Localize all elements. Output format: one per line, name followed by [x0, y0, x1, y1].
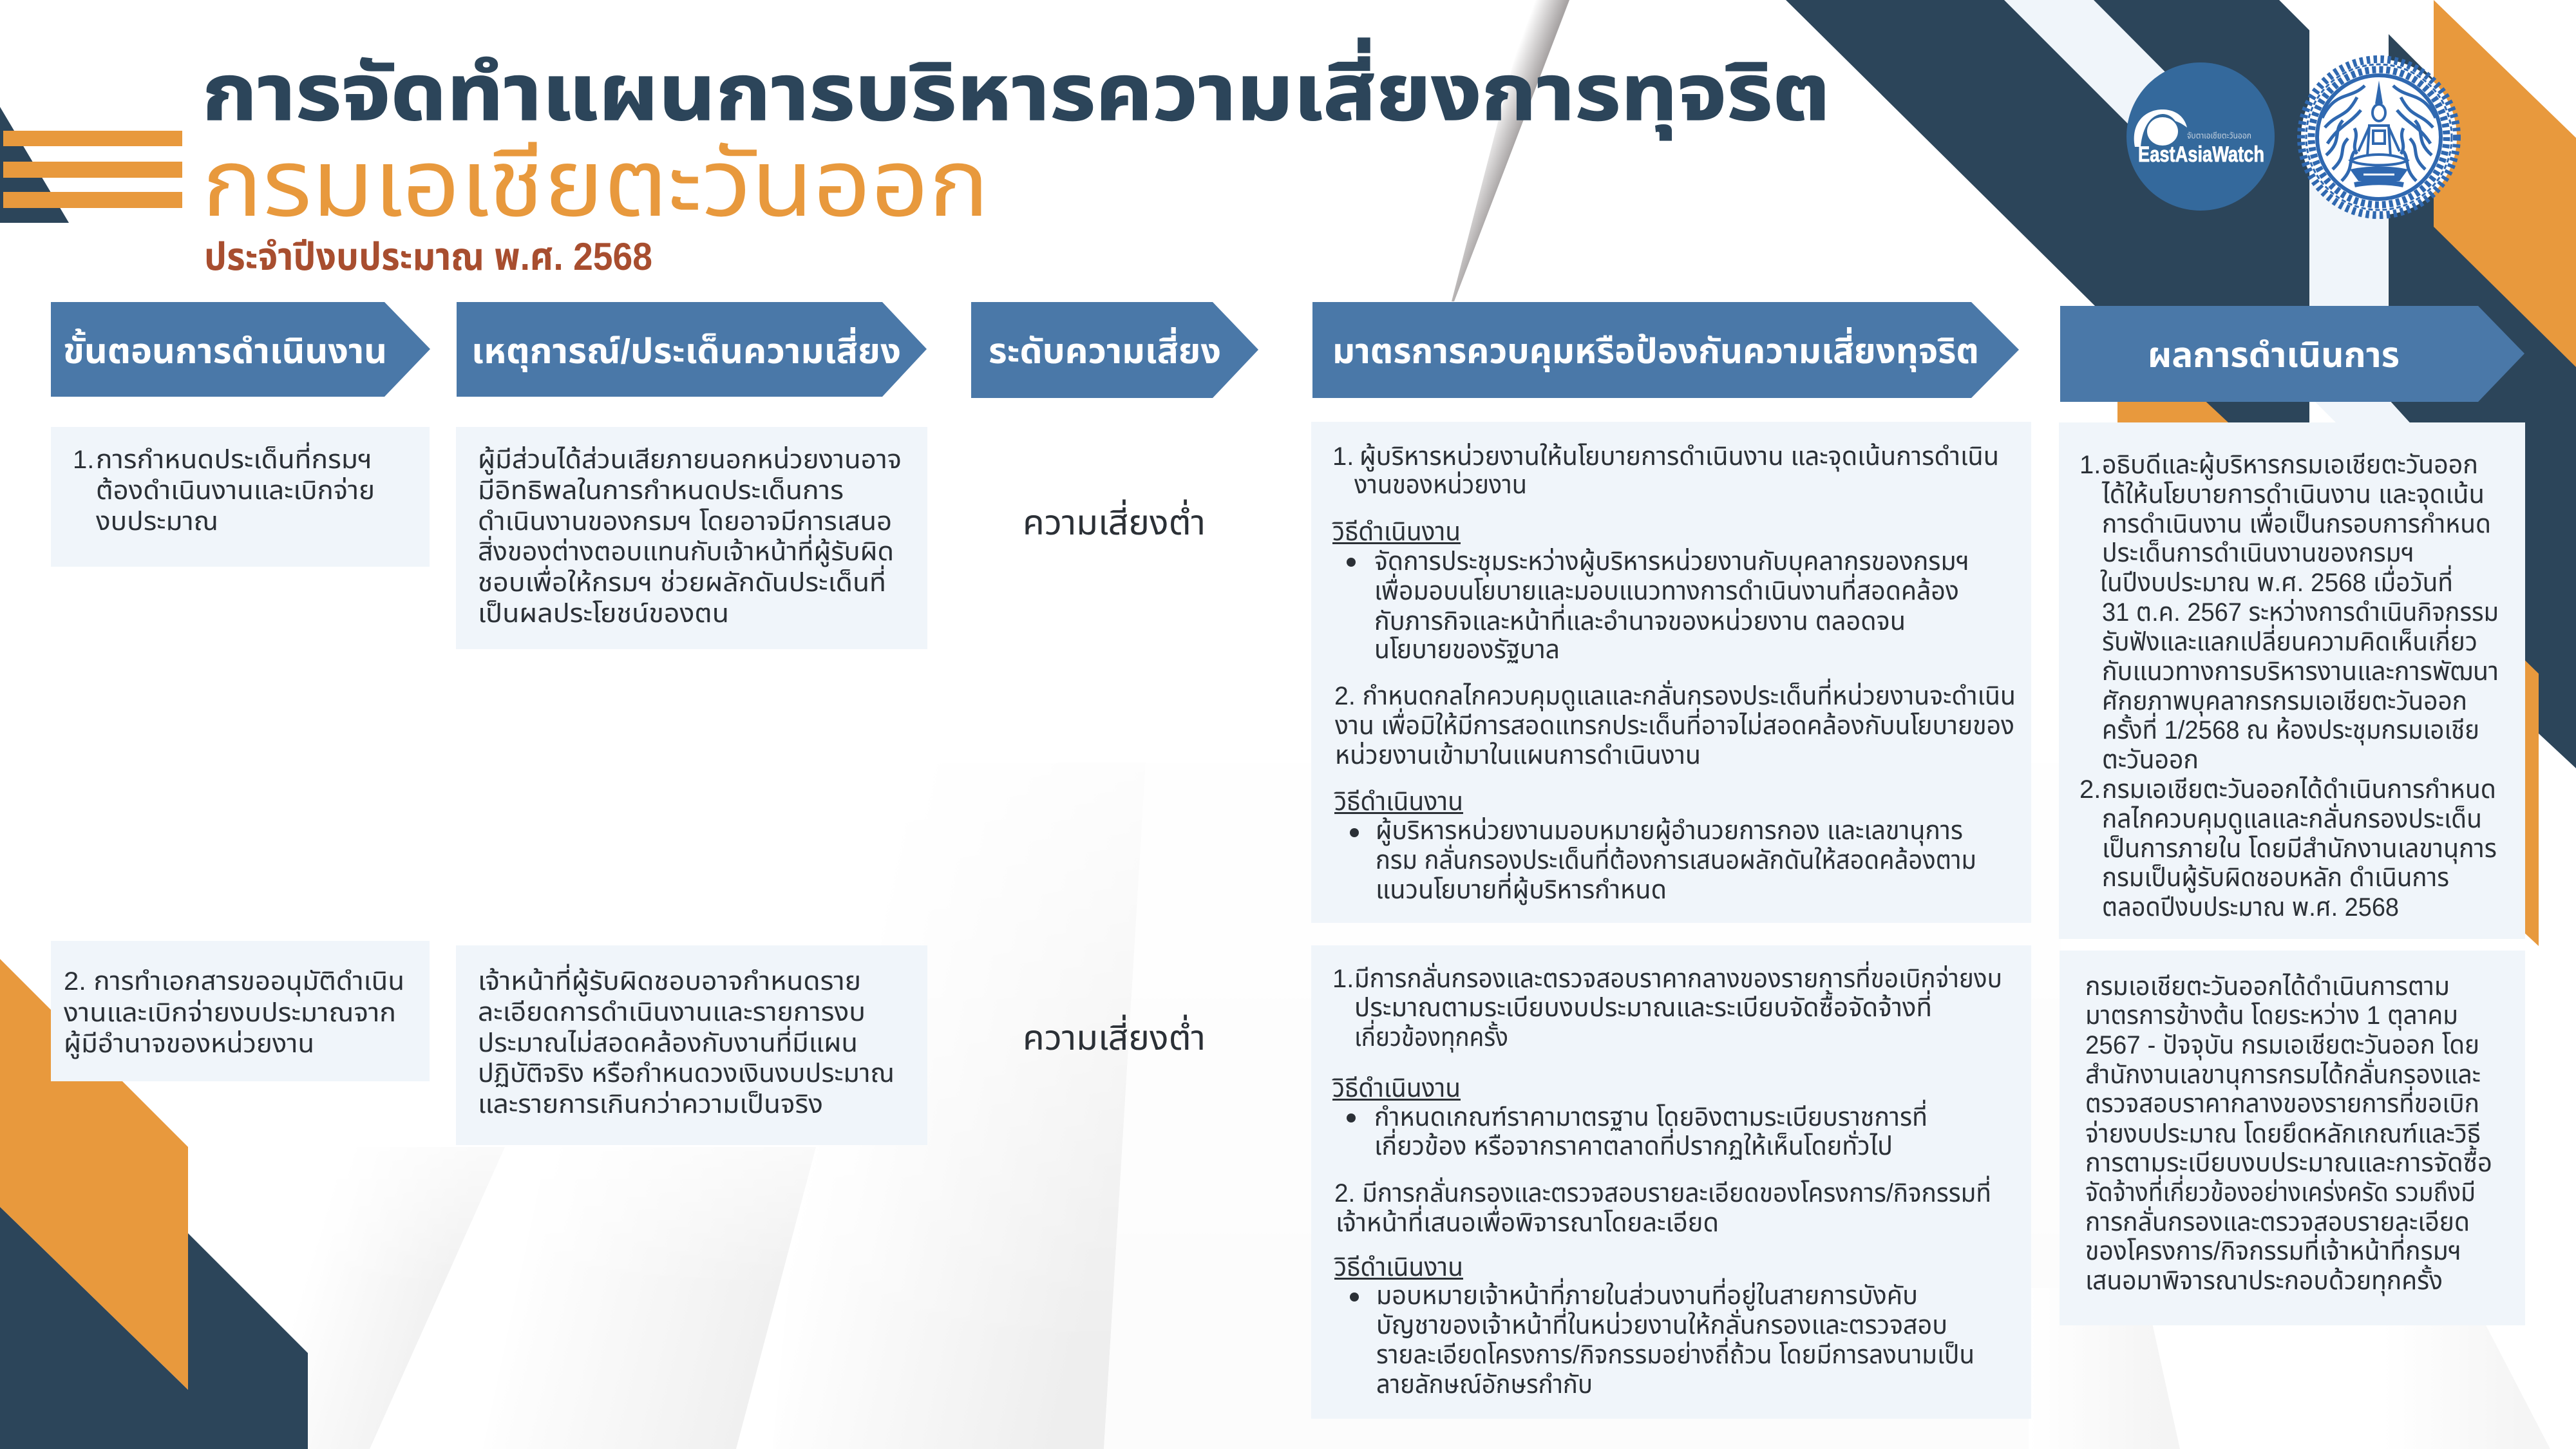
- panel: control measures 2: มีการกลั่นกรองและตรวจสอบราคากลางของรายการที่ขอเบิกจ่ายงบ: [1354, 961, 2002, 993]
- panel: results 1: 2.: [2079, 775, 2101, 804]
- panel: results 1: กรมเป็นผู้รับผิดชอบหลัก ดำเนินการ: [2102, 864, 2449, 893]
- panel: control measures 1: ผู้บริหารหน่วยงานมอบหมายผู้อำนวยการกอง และเลขานุการ: [1376, 817, 1963, 846]
- panel: risk event 1: ดำเนินงานของกรมฯ โดยอาจมีการเสนอ: [478, 507, 892, 536]
- panel: results 2: ตรวจสอบราคากลางของรายการที่ขอเบิก: [2085, 1086, 2479, 1118]
- panel: control measures 1: งานของหน่วยงาน: [1354, 471, 1527, 499]
- panel: control measures 1: กับภารกิจและหน้าที่และอำนาจของหน่วยงาน ตลอดจน: [1374, 603, 1906, 636]
- panel: risk event 2: ปฏิบัติจริง หรือกำหนดวงเงินงบประมาณ: [478, 1059, 895, 1088]
- panel: control measures 2: กำหนดเกณฑ์ราคามาตรฐาน โดยอิงตามระเบียบราชการที่: [1374, 1099, 1927, 1132]
- panel: step 2: งานและเบิกจ่ายงบประมาณจาก: [64, 999, 396, 1027]
- panel: step 1: งบประมาณ: [96, 507, 218, 536]
- panel: control measures 1: 2. กำหนดกลไกควบคุมดูแลและกลั่นกรองประเด็นที่หน่วยงานจะดำเนิน: [1334, 678, 2016, 711]
- panel: control measures 1: แนวนโยบายที่ผู้บริหารกำหนด: [1376, 872, 1667, 905]
- panel: risk event 2: และรายการเกินกว่าความเป็นจริง: [478, 1090, 823, 1119]
- panel: control measures 2: รายละเอียดโครงการ/กิจกรรมอย่างถี่ถ้วน โดยมีการลงนามเป็น: [1376, 1337, 1975, 1369]
- panel: control measures 1: เพื่อมอบนโยบายและมอบแนวทางการดำเนินงานที่สอดคล้อง: [1374, 573, 1959, 605]
- panel: results 1: กับแนวทางการบริหารงานและการพัฒนา: [2102, 658, 2499, 686]
- panel: control measures 2: 2. มีการกลั่นกรองและตรวจสอบรายละเอียดของโครงการ/กิจกรรมที่: [1334, 1175, 1991, 1208]
- panel: results 2: ของโครงการ/กิจกรรมที่เจ้าหน้าที่กรมฯ: [2085, 1233, 2461, 1265]
- panel: risk event 2: ละเอียดการดำเนินงานและรายการงบ: [478, 998, 866, 1027]
- panel: control measures 1: จัดการประชุมระหว่างผู้บริหารหน่วยงานกับบุคลากรของกรมฯ: [1374, 547, 1969, 576]
- logo: department seal: [2301, 59, 2457, 215]
- panel: results 1: ครั้งที่ 1/2568 ณ ห้องประชุมกรมเอเชีย: [2102, 712, 2479, 745]
- header arrow: results: ผลการดำเนินการ: [2148, 336, 2400, 375]
- panel: results 1: ตลอดปีงบประมาณ พ.ศ. 2568: [2102, 893, 2399, 922]
- panel: control measures 2: 1.: [1332, 965, 1354, 993]
- panel: control measures 1: [1311, 422, 2031, 923]
- header arrow: control measures: มาตรการควบคุมหรือป้องกันความเสี่ยงทุจริต: [1332, 327, 1979, 372]
- header arrow: process steps: ขั้นตอนการดำเนินงาน: [63, 328, 387, 371]
- panel: control measures 1: กรม กลั่นกรองประเด็นที่ต้องการเสนอผลักดันให้สอดคล้องตาม: [1376, 842, 1976, 875]
- header arrow: risk events: [457, 302, 927, 397]
- panel: results 2: การตามระเบียบงบประมาณและการจัดซื้อ: [2085, 1145, 2492, 1177]
- panel: control measures 2: [1311, 945, 2031, 1419]
- panel: control measures 1: หน่วยงานเข้ามาในแผนการดำเนินงาน: [1335, 741, 1701, 770]
- panel: risk event 2: ประมาณไม่สอดคล้องกับงานที่มีแผน: [478, 1025, 858, 1057]
- panel: results 1: ศักยภาพบุคลากรกรมเอเชียตะวันออก: [2102, 687, 2467, 716]
- panel: results 1: ตะวันออก: [2102, 746, 2199, 774]
- panel: control measures 1: 1.: [1332, 442, 1354, 471]
- panel: control measures 1: งาน เพื่อมิให้มีการสอดแทรกประเด็นที่อาจไม่สอดคล้องกับนโยบายของ: [1335, 708, 2014, 740]
- panel: control measures 1: วิธีดำเนินงาน: [1334, 788, 1463, 816]
- panel: control measures 2: เกี่ยวข้อง หรือจากราคาตลาดที่ปรากฏให้เห็นโดยทั่วไป: [1374, 1128, 1893, 1160]
- panel: risk event 1: สิ่งของต่างตอบแทนกับเจ้าหน้าที่ผู้รับผิด: [478, 534, 894, 567]
- panel: risk event 2: เจ้าหน้าที่ผู้รับผิดชอบอาจกำหนดราย: [478, 963, 861, 996]
- panel: results 1: กรมเอเชียตะวันออกได้ดำเนินการกำหนด: [2102, 775, 2496, 804]
- panel: results 1: การดำเนินงาน เพื่อเป็นกรอบการกำหนด: [2102, 506, 2491, 538]
- panel: control measures 1: วิธีดำเนินงาน: [1332, 518, 1461, 546]
- logo: East Asia Watch: EastAsiaWatch: [2138, 142, 2264, 167]
- panel: results 1: 31 ต.ค. 2567 ระหว่างการดำเนินกิจกรรม: [2102, 598, 2499, 627]
- panel: results 2: สำนักงานเลขานุการกรมได้กลั่นกรองและ: [2085, 1058, 2481, 1090]
- panel: control measures 2: วิธีดำเนินงาน: [1332, 1074, 1461, 1103]
- risk level label 1: ความเสี่ยงต่ำ: [1023, 499, 1206, 542]
- decoration: bottom-left bands: [0, 959, 308, 1449]
- panel: risk event 1: ผู้มีส่วนได้ส่วนเสียภายนอกหน่วยงานอาจ: [478, 446, 902, 475]
- risk level label 2: ความเสี่ยงต่ำ: [1023, 1014, 1206, 1057]
- panel: control measures 2: บัญชาของเจ้าหน้าที่ในหน่วยงานให้กลั่นกรองและตรวจสอบ: [1376, 1307, 1947, 1340]
- panel: results 2: การกลั่นกรองและตรวจสอบรายละเอียด: [2085, 1206, 2470, 1236]
- panel: step 2: ผู้มีอำนาจของหน่วยงาน: [64, 1030, 314, 1059]
- panel: control measures 2: ลายลักษณ์อักษรกำกับ: [1376, 1370, 1593, 1399]
- panel: step 1: 1.: [73, 446, 94, 474]
- panel: results 1: เป็นการภายใน โดยมีสำนักงานเลขานุการ: [2102, 835, 2497, 864]
- panel: control measures 1: ผู้บริหารหน่วยงานให้นโยบายการดำเนินงาน และจุดเน้นการดำเนิน: [1359, 442, 1999, 471]
- panel: results 2: 2567 - ปัจจุบัน กรมเอเชียตะวันออก โดย: [2085, 1031, 2479, 1060]
- panel: control measures 2: เกี่ยวข้องทุกครั้ง: [1354, 1019, 1508, 1052]
- panel: results 1: 1.: [2079, 451, 2101, 479]
- subtitle: กรมเอเชียตะวันออก: [202, 131, 989, 236]
- panel: step 2: [51, 941, 430, 1081]
- panel: results 1: ประเด็นการดำเนินงานของกรมฯ: [2102, 539, 2414, 567]
- panel: risk event 1: [456, 427, 927, 649]
- panel: results 2: จ่ายงบประมาณ โดยยึดหลักเกณฑ์และวิธี: [2085, 1120, 2481, 1148]
- fiscal year line: ประจำปีงบประมาณ พ.ศ. 2568: [204, 235, 652, 278]
- panel: results 1: กลไกควบคุมดูแลและกลั่นกรองประเด็น: [2102, 802, 2482, 834]
- panel: risk event 1: มีอิทธิพลในการกำหนดประเด็นการ: [478, 477, 844, 505]
- header arrow: risk events: เหตุการณ์/ประเด็นความเสี่ยง: [471, 327, 901, 372]
- panel: step 2: 2. การทำเอกสารขออนุมัติดำเนิน: [64, 967, 404, 996]
- header arrow: risk level: ระดับความเสี่ยง: [989, 327, 1221, 371]
- panel: results 1: รับฟังและแลกเปลี่ยนความคิดเห็นเกี่ยว: [2102, 624, 2477, 656]
- panel: step 1: [51, 427, 430, 567]
- panel: results 1: [2059, 422, 2525, 939]
- panel: control measures 1: นโยบายของรัฐบาล: [1374, 636, 1560, 664]
- decoration: top-left triangle and orange bars: [0, 107, 182, 223]
- logo: East Asia Watch: [2126, 62, 2275, 211]
- panel: control measures 2: เจ้าหน้าที่เสนอเพื่อพิจารณาโดยละเอียด: [1336, 1205, 1719, 1237]
- panel: step 1: การกำหนดประเด็นที่กรมฯ: [96, 442, 372, 474]
- panel: results 1: ได้ให้นโยบายการดำเนินงาน และจุดเน้น: [2101, 480, 2485, 509]
- title: การจัดทำแผนการบริหารความเสี่ยงการทุจริต: [202, 38, 1830, 140]
- panel: results 1: อธิบดีและผู้บริหารกรมเอเชียตะวันออก: [2102, 451, 2478, 480]
- header arrow: control measures: [1312, 302, 2019, 398]
- panel: risk event 1: เป็นผลประโยชน์ของตน: [478, 600, 729, 628]
- panel: risk event 2: [456, 945, 927, 1145]
- panel: results 2: เสนอมาพิจารณาประกอบด้วยทุกครั้ง: [2085, 1264, 2443, 1296]
- panel: results 2: มาตรการข้างต้น โดยระหว่าง 1 ตุลาคม: [2085, 1001, 2458, 1030]
- panel: control measures 2: มอบหมายเจ้าหน้าที่ภายในส่วนงานที่อยู่ในสายการบังคับ: [1376, 1278, 1918, 1311]
- decoration: top-right geometric bands: [1786, 0, 2576, 946]
- header arrow: process steps: [51, 302, 430, 397]
- panel: control measures 2: วิธีดำเนินงาน: [1334, 1253, 1463, 1282]
- panel: control measures 2: ประมาณตามระเบียบงบประมาณและระเบียบจัดซื้อจัดจ้างที่: [1354, 990, 1932, 1022]
- panel: results 2: จัดจ้างที่เกี่ยวข้องอย่างเคร่งครัด รวมถึงมี: [2085, 1175, 2476, 1207]
- header arrow: risk level: [971, 302, 1258, 398]
- panel: step 1: ต้องดำเนินงานและเบิกจ่าย: [96, 477, 375, 505]
- panel: results 2: กรมเอเชียตะวันออกได้ดำเนินการตาม: [2085, 972, 2450, 1001]
- panel: results 1: ในปีงบประมาณ พ.ศ. 2568 เมื่อวันที่: [2100, 565, 2453, 597]
- panel: risk event 1: ชอบเพื่อให้กรมฯ ช่วยผลักดันประเด็นที่: [478, 565, 886, 597]
- header arrow: results: [2060, 306, 2524, 402]
- panel: results 2: [2060, 951, 2525, 1325]
- logo: East Asia Watch: จับตาเอเชียตะวันออก: [2187, 131, 2251, 140]
